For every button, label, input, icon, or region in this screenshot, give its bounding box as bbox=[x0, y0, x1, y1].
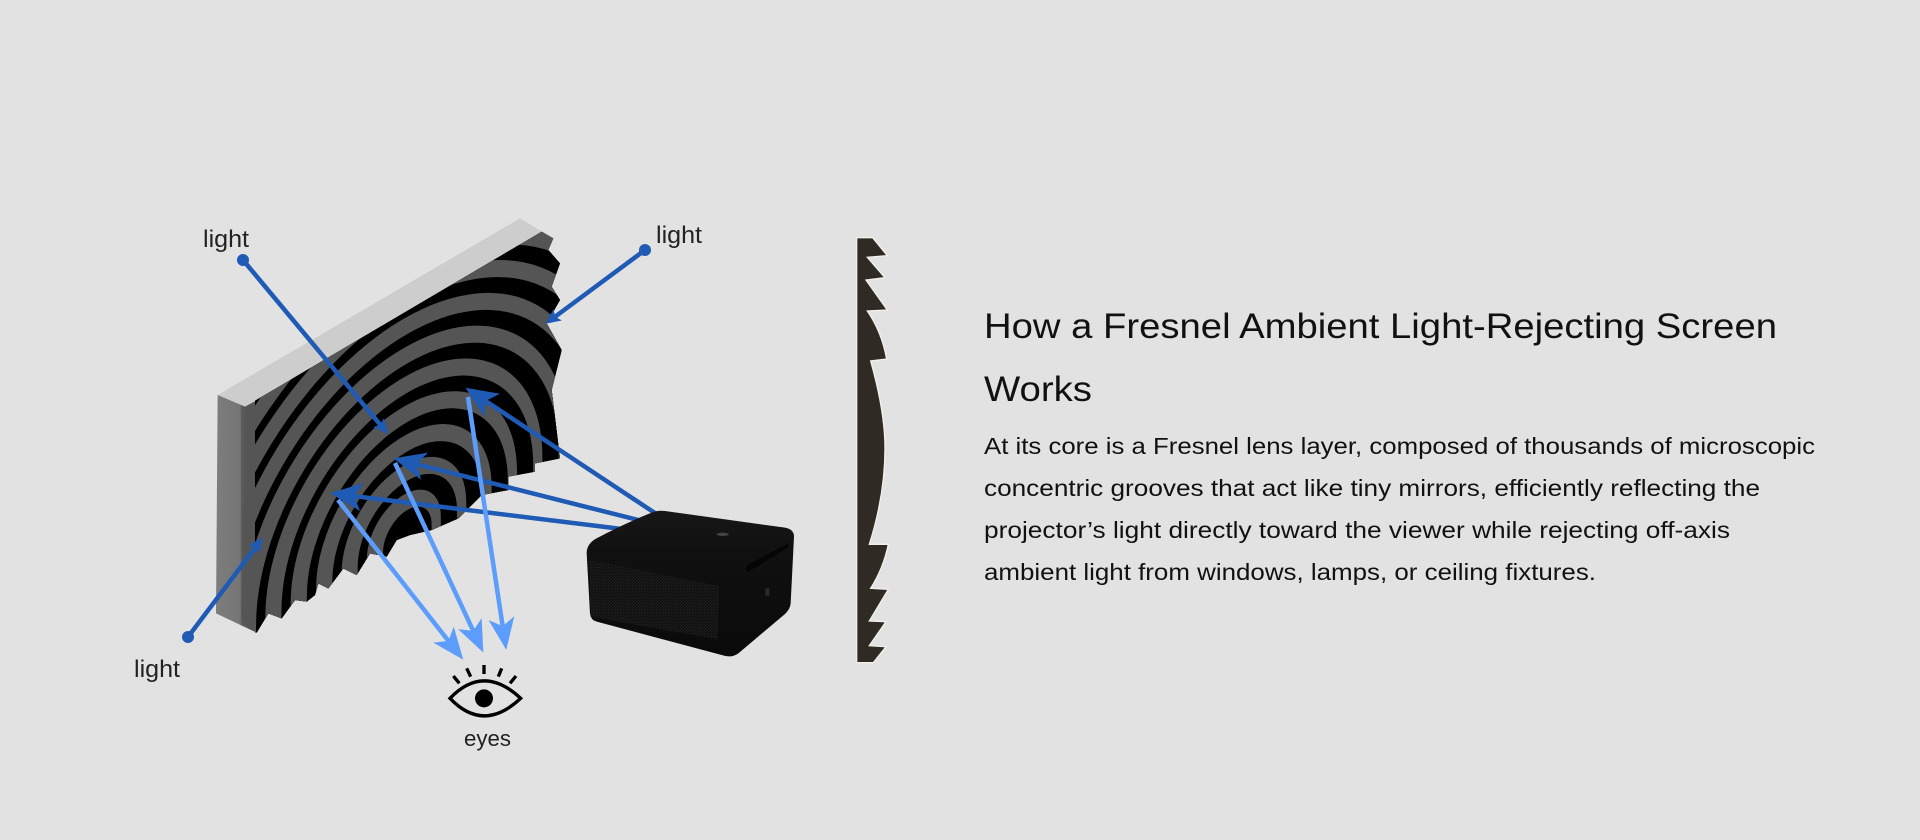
label: light top right: light bbox=[656, 222, 702, 249]
port strip bbox=[746, 543, 788, 572]
icon: eye bbox=[450, 665, 521, 716]
heading: How a Fresnel Ambient Light-Rejecting Screen bbox=[984, 306, 1777, 346]
arrow: projector beam 1 bbox=[478, 396, 670, 523]
heading: Works bbox=[984, 369, 1092, 409]
projector body bbox=[587, 511, 794, 656]
screen front face with stepped edge bbox=[242, 238, 562, 633]
arrow: ambient light top left bbox=[237, 254, 383, 428]
label: light bottom left: light bbox=[134, 656, 180, 683]
body text: ambient light from windows, lamps, or ceiling fixtures. bbox=[984, 559, 1596, 585]
label: eyes: eyes bbox=[464, 726, 511, 751]
arrow: reflected beam 3 bbox=[468, 397, 504, 635]
speaker grille bbox=[589, 560, 719, 639]
arrow: projector beam 2 bbox=[408, 462, 650, 523]
logo bbox=[717, 533, 729, 536]
diagram: Fresnel screen block bbox=[216, 218, 562, 633]
body text bbox=[984, 433, 1815, 585]
projector bbox=[587, 511, 794, 656]
screen side face bbox=[216, 395, 257, 633]
arrow: reflected beam 2 bbox=[395, 463, 477, 639]
arrow: projector beam 3 bbox=[345, 495, 630, 530]
body text: At its core is a Fresnel lens layer, composed of thousands of microscopic bbox=[984, 433, 1815, 459]
concentric Fresnel grooves bbox=[255, 232, 562, 633]
label: light top left: light bbox=[203, 226, 249, 253]
heading bbox=[984, 306, 1777, 409]
arrow: ambient light top right bbox=[552, 244, 651, 319]
screen top face bbox=[218, 218, 553, 407]
arrow: ambient light bottom left bbox=[182, 544, 258, 643]
lens cross-section bbox=[857, 238, 888, 663]
body text: projector’s light directly toward the viewer while rejecting off-axis bbox=[984, 517, 1730, 543]
side button bbox=[765, 588, 769, 596]
body text: concentric grooves that act like tiny mirrors, efficiently reflecting the bbox=[984, 475, 1760, 501]
arrow: reflected beam 1 bbox=[338, 500, 454, 648]
